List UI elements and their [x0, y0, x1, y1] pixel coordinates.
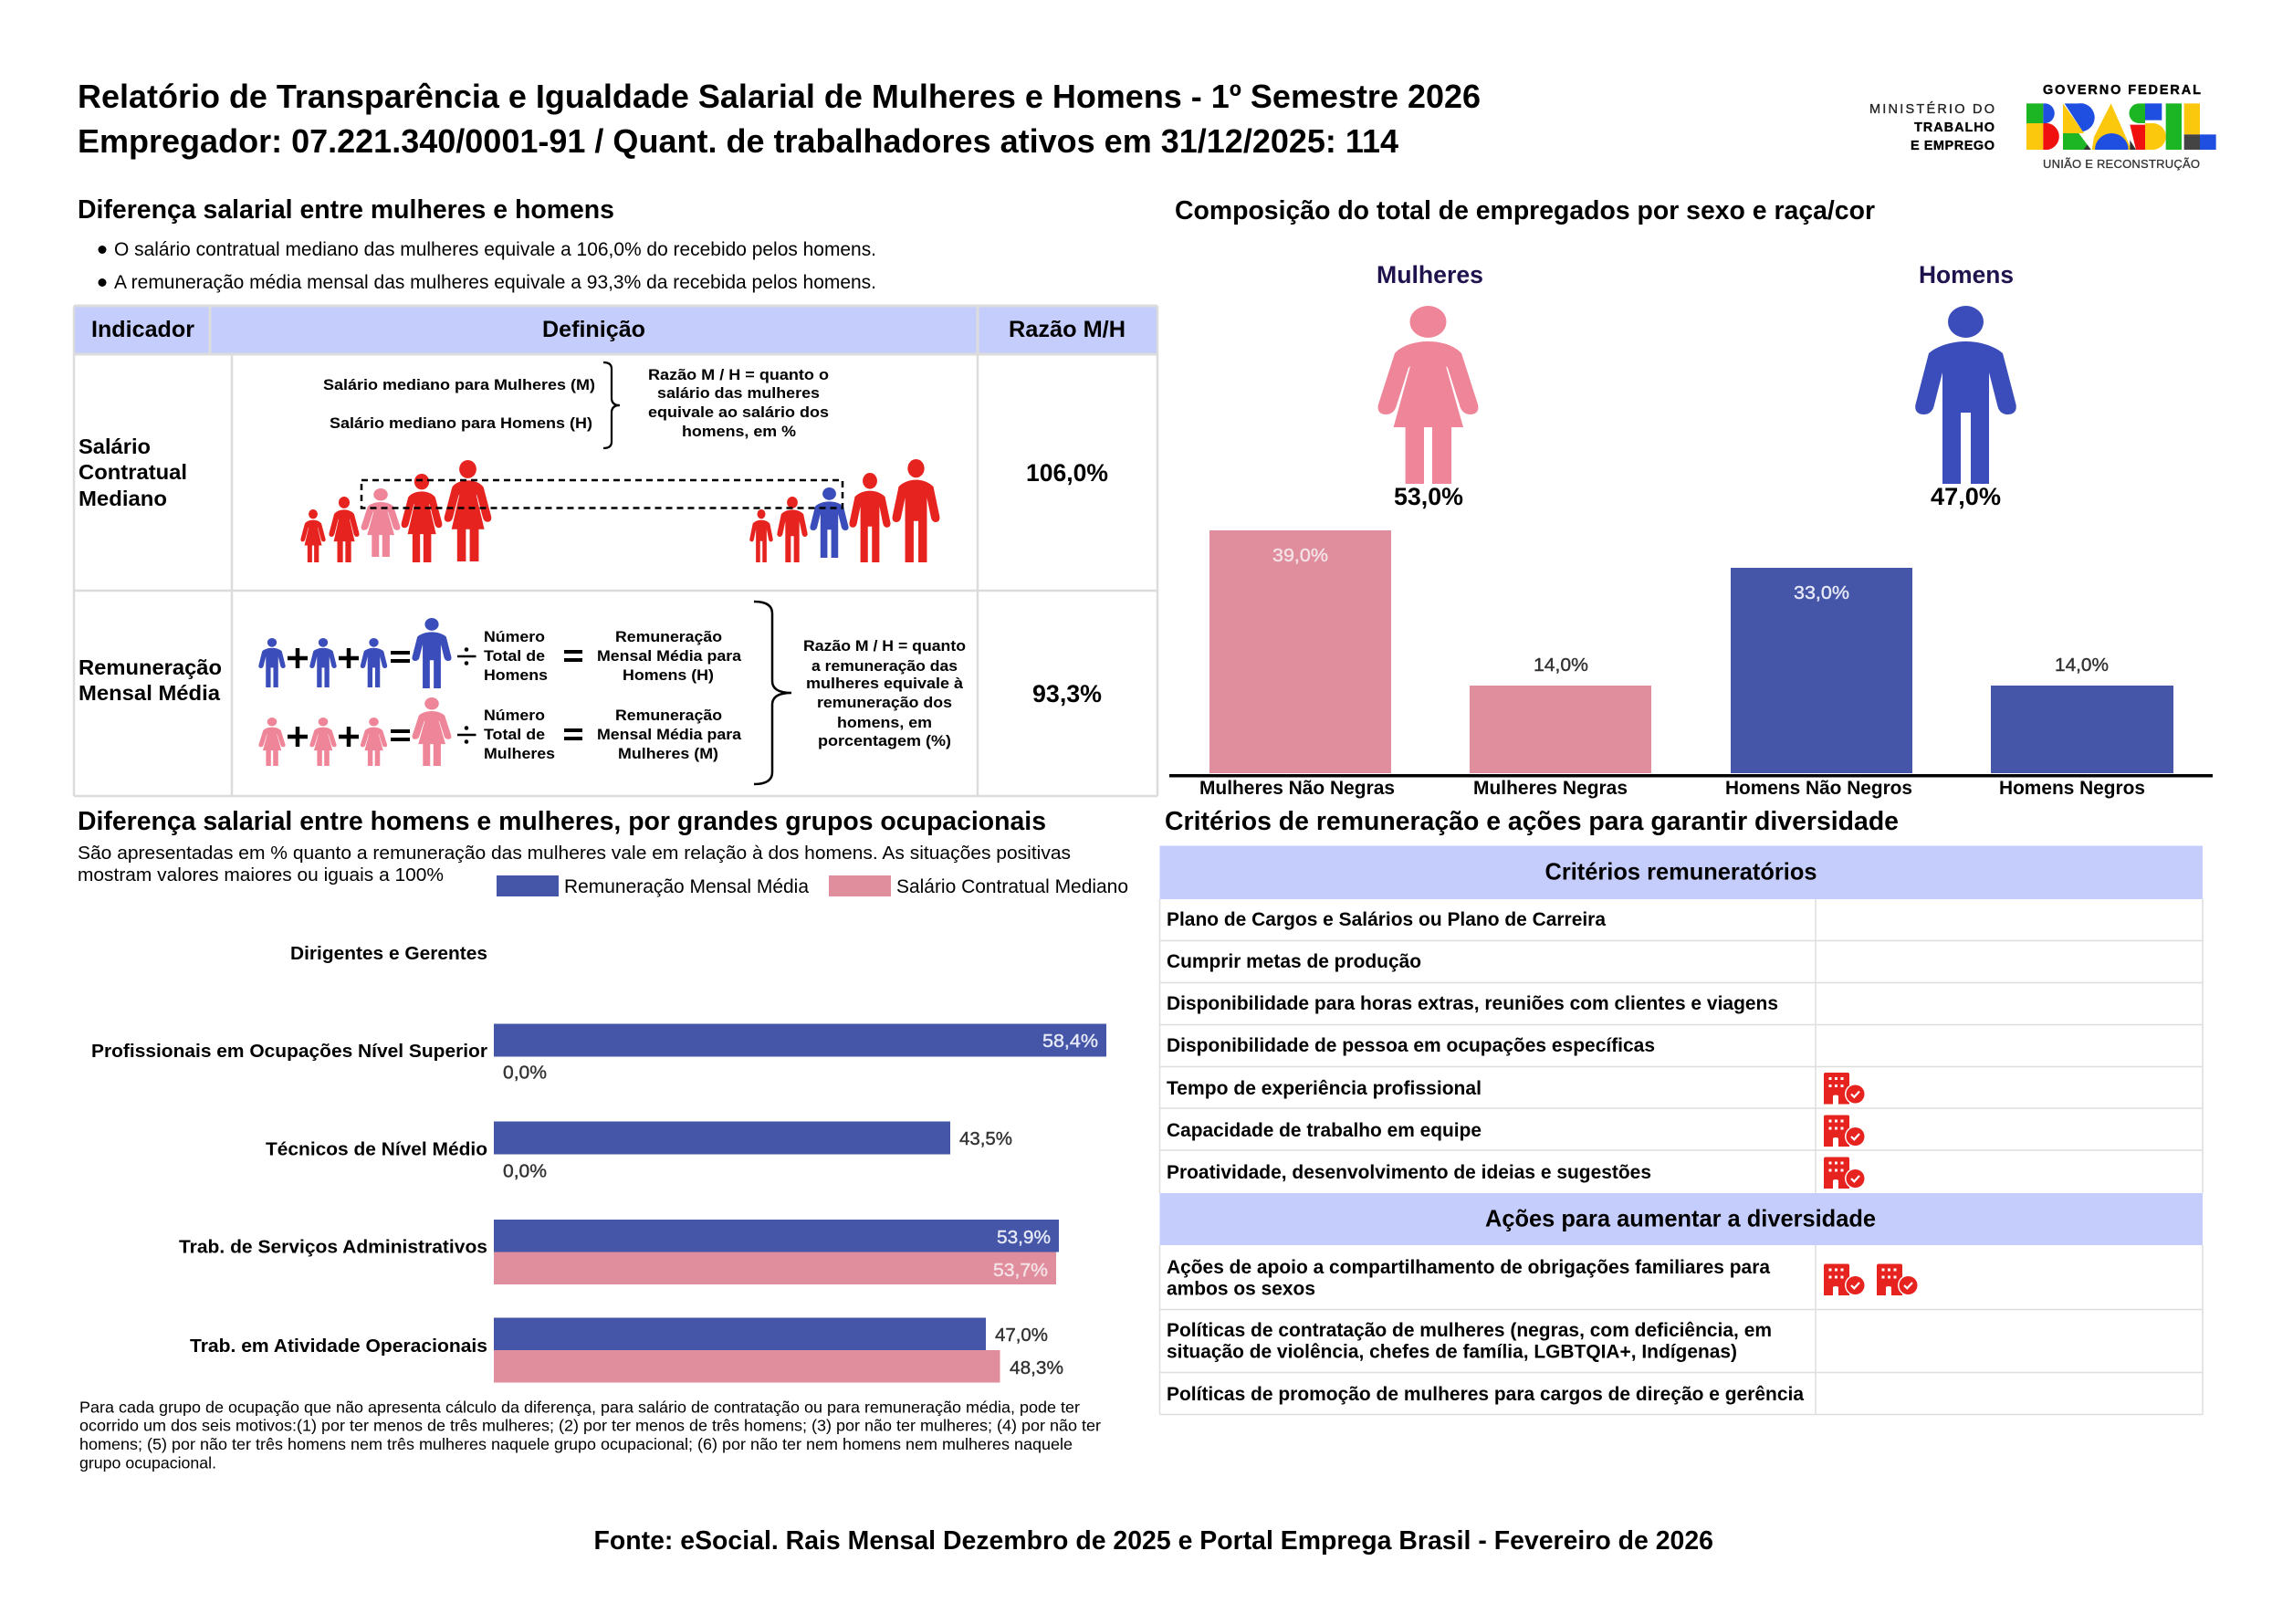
- data labels: 48,3%: [1010, 1357, 1063, 1378]
- nota de rodapé: ocorrido um dos seis motivos:(1) por ter menos de três mulheres; (2) por ter menos de três homens; (3) por não ter mulheres; (4) por não ter: [79, 1417, 1101, 1435]
- bar chart: composição por sexo e raça/cor: 33,0%: [1794, 582, 1849, 603]
- value: 106,0%: 106,0%: [1026, 459, 1108, 487]
- data labels: 43,5%: [959, 1128, 1012, 1149]
- definição: salário mediano: Razão M / H = quanto o: [648, 366, 829, 383]
- ações list: Ações de apoio a compartilhamento de obrigações familiares para: [1167, 1257, 1770, 1278]
- definição: salário mediano: Salário mediano para Mulheres (M): [323, 376, 595, 393]
- heading: grandes grupos ocupacionais: Diferença salarial entre homens e mulheres, por grandes grupos ocupacionais: [78, 807, 1046, 836]
- critérios list: Disponibilidade para horas extras, reuniões com clientes e viagens: [1167, 993, 1778, 1014]
- bullet list: resumo: O salário contratual mediano das mulheres equivale a 106,0% do recebido pelos homens.: [114, 239, 876, 260]
- bullet list: resumo: A remuneração média mensal das mulheres equivale a 93,3% da recebida pelos homens.: [114, 272, 876, 293]
- table heading: ações: Ações para aumentar a diversidade: [1485, 1205, 1876, 1232]
- table header: Razão M/H: [1009, 317, 1126, 342]
- logo: ministério do trabalho e emprego: TRABALHO: [1914, 120, 1995, 135]
- critérios list: Disponibilidade de pessoa em ocupações específicas: [1167, 1035, 1655, 1056]
- chave e explicação da razão: [754, 602, 966, 784]
- category labels: Técnicos de Nível Médio: [266, 1139, 487, 1159]
- fórmula: mulheres: Total de: [484, 726, 545, 743]
- texto explicativo: [78, 843, 1071, 885]
- texto explicativo: São apresentadas em % quanto a remuneração das mulheres vale em relação à dos homens. As situações positivas: [78, 843, 1071, 864]
- icon: empresa com check: [1824, 1073, 1866, 1105]
- bar chart: composição por sexo e raça/cor: 39,0%: [1272, 545, 1328, 566]
- heading: critérios: Critérios de remuneração e ações para garantir diversidade: [1165, 807, 1899, 836]
- bar chart: grupos ocupacionais: [91, 943, 1106, 1382]
- bar chart: composição por sexo e raça/cor: Homens Negros: [1999, 778, 2145, 799]
- panel: composição mulheres: 53,0%: [1394, 483, 1463, 510]
- chave e explicação da razão: Razão M / H = quanto: [803, 637, 966, 655]
- data labels: 53,7%: [993, 1260, 1048, 1281]
- critérios list: Proatividade, desenvolvimento de ideias e sugestões: [1167, 1162, 1651, 1183]
- critérios list: Tempo de experiência profissional: [1167, 1078, 1482, 1099]
- bar chart: composição por sexo e raça/cor: [1169, 530, 2213, 799]
- nota de rodapé: homens; (5) por não ter três homens nem três mulheres naquele grupo ocupacional; (6) por não ter nem homens nem mulheres naquele: [79, 1435, 1073, 1453]
- data labels: 0,0%: [503, 1063, 547, 1083]
- fórmula: homens: Homens (H): [623, 666, 714, 684]
- panel: composição homens: [1915, 261, 2016, 510]
- table header: Definição: [542, 317, 645, 342]
- category labels: Dirigentes e Gerentes: [290, 943, 487, 964]
- data labels: 0,0%: [503, 1161, 547, 1181]
- category labels: Trab. de Serviços Administrativos: [179, 1236, 487, 1258]
- data labels: 58,4%: [1042, 1031, 1098, 1052]
- row label: salário contratual mediano: Salário: [79, 435, 151, 458]
- legend: Salário Contratual Mediano: [896, 876, 1128, 897]
- icon: empresa com check: [1824, 1263, 1866, 1296]
- bullet list: resumo: [99, 239, 876, 293]
- panel: composição homens: 47,0%: [1931, 483, 2001, 510]
- logo: governo federal brasil: GOVERNO FEDERAL: [2043, 83, 2201, 98]
- row label: remuneração mensal média: Mensal Média: [79, 681, 221, 705]
- nota de rodapé: Para cada grupo de ocupação que não apresenta cálculo da diferença, para salário de contratação ou para remuneração média, pode ter: [79, 1399, 1080, 1417]
- heading: diferença salarial: Diferença salarial entre mulheres e homens: [78, 195, 614, 225]
- panel: composição homens: Homens: [1919, 261, 2014, 288]
- icon: empresa com check: [1824, 1116, 1866, 1147]
- ações list: Políticas de promoção de mulheres para cargos de direção e gerência: [1167, 1384, 1804, 1405]
- fórmula: mulheres: Número: [484, 707, 545, 724]
- definição: salário mediano: [323, 362, 829, 448]
- texto explicativo: mostram valores maiores ou iguais a 100%: [78, 864, 444, 885]
- definição: salário mediano: equivale ao salário dos: [648, 403, 829, 421]
- ações list: situação de violência, chefes de família, LGBTQIA+, Indígenas): [1167, 1342, 1737, 1362]
- data labels: 53,9%: [997, 1227, 1051, 1248]
- chave e explicação da razão: homens, em: [837, 714, 932, 731]
- fórmula: mulheres: Mensal Média para: [597, 726, 742, 743]
- logo: governo federal brasil: [2026, 83, 2216, 171]
- chave e explicação da razão: porcentagem (%): [818, 732, 951, 749]
- ações list: [1167, 1257, 1804, 1405]
- fórmula: homens: Homens: [484, 666, 548, 684]
- data labels: [503, 1031, 1098, 1378]
- row label: remuneração mensal média: [79, 655, 222, 705]
- fórmula: mulheres: Mulheres: [484, 745, 555, 762]
- category labels: Profissionais em Ocupações Nível Superior: [91, 1041, 487, 1062]
- chave e explicação da razão: mulheres equivale à: [806, 675, 964, 692]
- row label: remuneração mensal média: Remuneração: [79, 655, 222, 679]
- definição: salário mediano: salário das mulheres: [657, 384, 820, 402]
- chave e explicação da razão: remuneração dos: [817, 694, 952, 711]
- bar chart: composição por sexo e raça/cor: Mulheres Negras: [1473, 778, 1628, 799]
- icon: empresa com check: [1824, 1158, 1866, 1189]
- category labels: [91, 943, 487, 1357]
- panel: composição mulheres: [1377, 261, 1483, 510]
- icon: empresa com check: [1877, 1263, 1919, 1296]
- panel: tabela de critérios: [1159, 845, 2203, 1415]
- critérios list: Plano de Cargos e Salários ou Plano de Carreira: [1167, 909, 1606, 930]
- logo: governo federal brasil: UNIÃO E RECONSTRUÇÃO: [2043, 157, 2200, 171]
- data labels: 47,0%: [995, 1325, 1048, 1346]
- critérios list: [1167, 909, 1778, 1183]
- fórmula: homens: Remuneração: [615, 628, 722, 645]
- fórmula: homens: Total de: [484, 647, 545, 665]
- icon group: homens ordenados por salário: [749, 459, 939, 562]
- fórmula: mulheres: Mulheres (M): [618, 745, 718, 762]
- row label: salário contratual mediano: Contratual: [79, 460, 187, 484]
- row label: salário contratual mediano: [79, 435, 187, 510]
- legend: [497, 875, 1128, 897]
- title: Relatório de Transparência e Igualdade Salarial de Mulheres e Homens - 1º Semestre 2026: [78, 78, 1481, 115]
- table header: Indicador: [91, 317, 194, 342]
- bar chart: composição por sexo e raça/cor: Mulheres Não Negras: [1199, 778, 1395, 799]
- logo: ministério do trabalho e emprego: [1869, 101, 1995, 153]
- definição: salário mediano: homens, em %: [682, 423, 796, 440]
- chave e explicação da razão: a remuneração das: [811, 657, 958, 675]
- icon group: mulheres ordenadas por salário: [300, 460, 491, 562]
- fórmula: homens: [258, 618, 742, 688]
- panel: composição mulheres: Mulheres: [1377, 261, 1483, 288]
- panel: tabela de indicadores: [74, 306, 1157, 796]
- row label: salário contratual mediano: Mediano: [79, 487, 167, 510]
- nota de rodapé: grupo ocupacional.: [79, 1453, 216, 1472]
- logo: ministério do trabalho e emprego: E EMPREGO: [1911, 139, 1995, 153]
- bar chart: composição por sexo e raça/cor: 14,0%: [2055, 655, 2109, 676]
- fonte: Fonte: eSocial. Rais Mensal Dezembro de 2025 e Portal Emprega Brasil - Fevereiro de 2026: [593, 1526, 1713, 1556]
- nota de rodapé: [79, 1399, 1101, 1472]
- fórmula: homens: Mensal Média para: [597, 647, 742, 665]
- heading: composição: Composição do total de empregados por sexo e raça/cor: [1175, 196, 1875, 225]
- critérios list: Cumprir metas de produção: [1167, 951, 1421, 972]
- bar chart: composição por sexo e raça/cor: 14,0%: [1534, 655, 1588, 676]
- logo: ministério do trabalho e emprego: MINISTÉRIO DO: [1869, 101, 1995, 117]
- ações list: Políticas de contratação de mulheres (negras, com deficiência, em: [1167, 1320, 1772, 1341]
- category labels: Trab. em Atividade Operacionais: [190, 1336, 487, 1357]
- critérios list: Capacidade de trabalho em equipe: [1167, 1120, 1482, 1141]
- table header: [74, 306, 1157, 354]
- fórmula: homens: Número: [484, 628, 545, 645]
- value: 93,3%: 93,3%: [1032, 680, 1102, 707]
- fórmula: mulheres: [258, 697, 742, 766]
- ações list: ambos os sexos: [1167, 1278, 1315, 1300]
- table heading: critérios remuneratórios: Critérios remuneratórios: [1544, 858, 1817, 885]
- mediana: retângulo tracejado: [361, 480, 843, 508]
- title: [78, 78, 1481, 160]
- bar chart: composição por sexo e raça/cor: Homens Não Negros: [1725, 778, 1912, 799]
- title: Empregador: 07.221.340/0001-91 / Quant. de trabalhadores ativos em 31/12/2025: 114: [78, 122, 1398, 160]
- definição: salário mediano: Salário mediano para Homens (H): [330, 414, 592, 432]
- fórmula: mulheres: Remuneração: [615, 707, 722, 724]
- bars: [494, 1024, 1106, 1382]
- legend: Remuneração Mensal Média: [564, 876, 809, 897]
